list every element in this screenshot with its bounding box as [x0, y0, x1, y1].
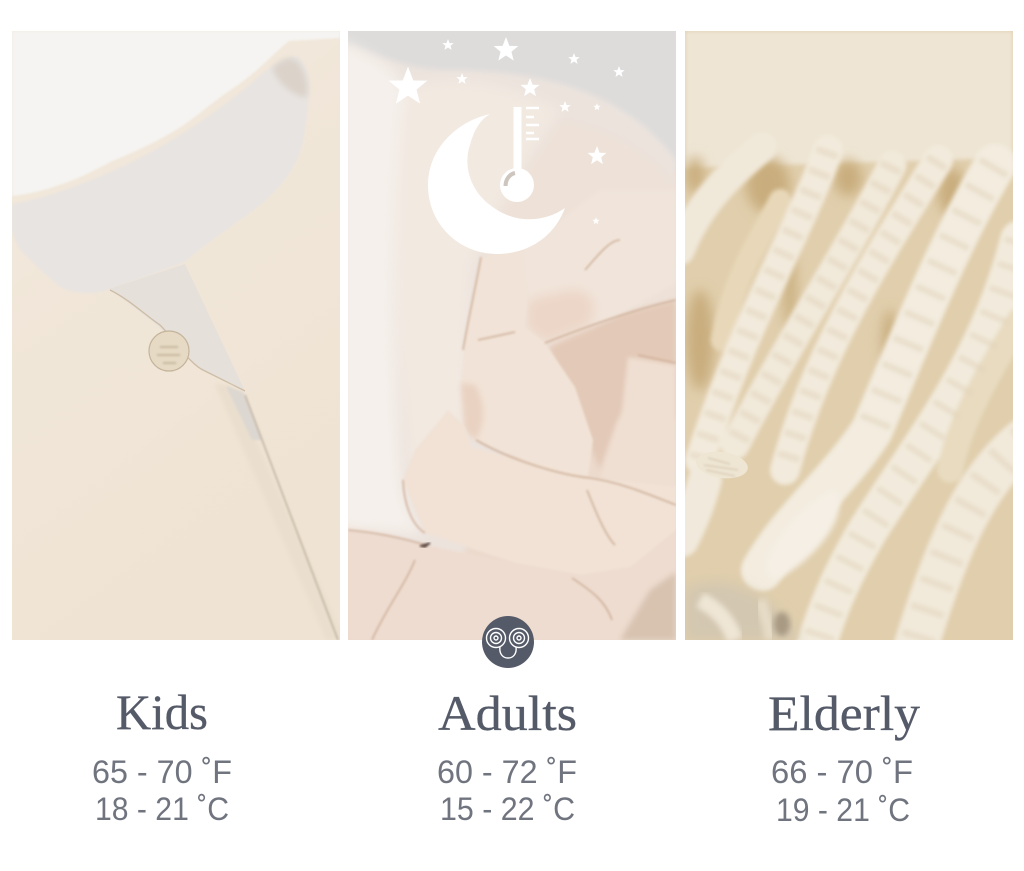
icon: crescent moon: [428, 114, 565, 254]
panel: kids photo: [12, 31, 340, 640]
panel: adults photo: [340, 31, 676, 640]
icon: ram logo badge: [482, 616, 534, 668]
woven blanket top: [685, 31, 1013, 168]
text: Adults Fahrenheit range: 60 - 72 ˚F: [437, 754, 577, 790]
heading: Elderly: Elderly: [768, 685, 920, 741]
text: Kids Celsius range: 18 - 21 ˚C: [95, 791, 229, 827]
right lobe: [618, 356, 676, 424]
creases: [348, 240, 676, 640]
heading: Kids: Kids: [116, 684, 208, 740]
icon: stars: [389, 37, 625, 224]
collar inner shadow: [272, 58, 308, 98]
text: Elderly Celsius range: 19 - 21 ˚C: [776, 792, 910, 828]
column: kids text: [92, 684, 232, 827]
dark gap: [420, 543, 430, 547]
heading: Adults: Adults: [438, 685, 577, 741]
collar lining: [12, 56, 309, 293]
zipper: [230, 406, 231, 407]
shadow gaps: [686, 157, 966, 390]
fringe tassels: [680, 147, 1024, 650]
tassel knot: [696, 452, 748, 478]
main roll: [403, 410, 676, 575]
untwisted tassel end: [780, 502, 842, 579]
frayed bottom row: [688, 584, 776, 638]
tassel twist marks: [700, 150, 1024, 650]
lining flap: [109, 264, 245, 391]
bottom fold: [433, 548, 460, 556]
icon: moon, thermometer and stars: [389, 37, 625, 254]
lobe shadow: [548, 300, 676, 470]
inner lobe: [462, 346, 594, 475]
text: Kids Fahrenheit range: 65 - 70 ˚F: [92, 754, 232, 790]
brown corner: [620, 572, 676, 640]
grey background at top: [348, 31, 676, 171]
column: elderly text: [768, 685, 920, 828]
upper right lobe: [609, 312, 621, 318]
panel: elderly photo: [680, 31, 1024, 650]
text: Elderly Fahrenheit range: 66 - 70 ˚F: [771, 754, 913, 790]
white background above the collar: [12, 31, 340, 196]
left white fold: [348, 42, 414, 533]
duvet upper body: [384, 60, 676, 552]
icon: thermometer: [500, 107, 539, 202]
wood button: [149, 331, 189, 371]
text: Adults Celsius range: 15 - 22 ˚C: [440, 791, 575, 827]
column: adults text: [437, 685, 577, 827]
